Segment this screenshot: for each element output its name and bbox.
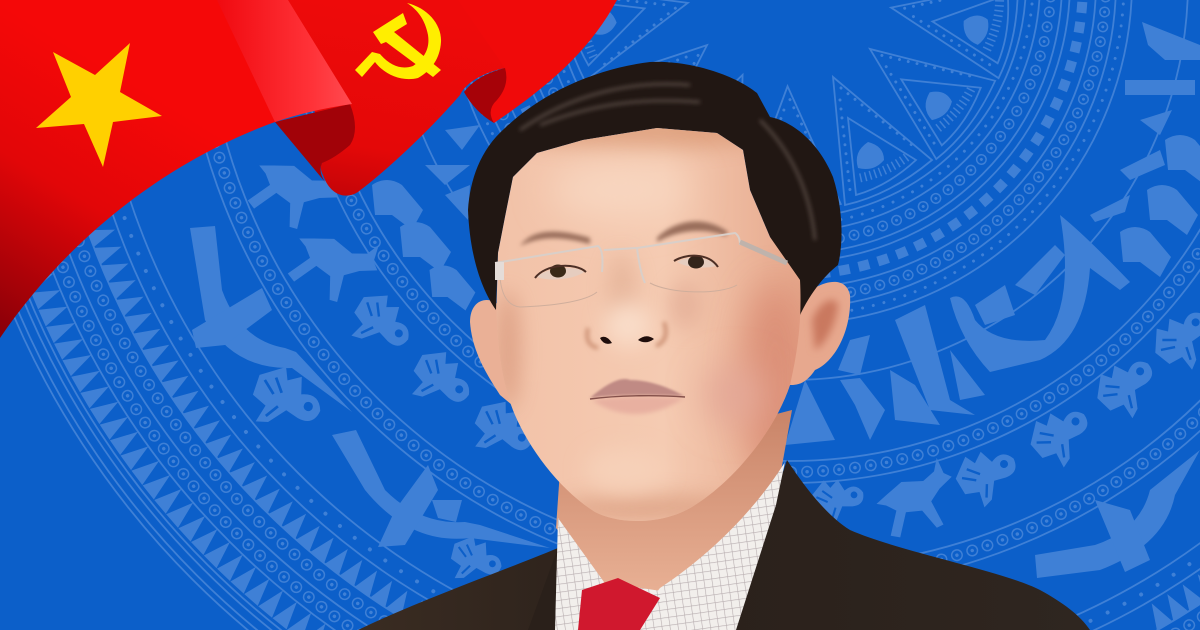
Vietnamese and Party flag ribbon	[0, 0, 617, 338]
shirt and collar	[555, 462, 785, 630]
hair highlights	[520, 84, 815, 240]
dark fold: right	[464, 68, 506, 123]
eyebrows	[520, 221, 728, 246]
boat motif	[950, 215, 1130, 372]
house and figure band	[372, 22, 1200, 445]
face	[497, 128, 801, 521]
nose	[600, 336, 654, 344]
neck	[556, 410, 792, 592]
eyes	[537, 258, 716, 279]
mouth	[590, 379, 684, 398]
icon: yellow star	[36, 43, 162, 167]
inner triangle tooth band	[77, 202, 1200, 630]
star rays around drum center	[541, 0, 1053, 245]
long-beak cranes	[190, 226, 1200, 592]
outer triangle tooth band	[14, 246, 380, 630]
dark fold: center	[275, 104, 355, 182]
flag panel: left section	[0, 0, 300, 338]
flag fold highlight	[217, 0, 352, 122]
left ear	[470, 300, 512, 405]
face shading	[496, 110, 809, 522]
hair	[468, 62, 842, 322]
glasses	[495, 233, 787, 307]
icon: hammer and sickle	[355, 3, 441, 79]
jacket	[358, 460, 1090, 630]
animal band: deer and birds	[239, 136, 1200, 541]
right ear	[790, 282, 850, 385]
portrait	[358, 62, 1090, 630]
flag panel: right section	[440, 0, 617, 123]
flag panel: center section	[270, 0, 505, 196]
necktie	[578, 578, 660, 630]
